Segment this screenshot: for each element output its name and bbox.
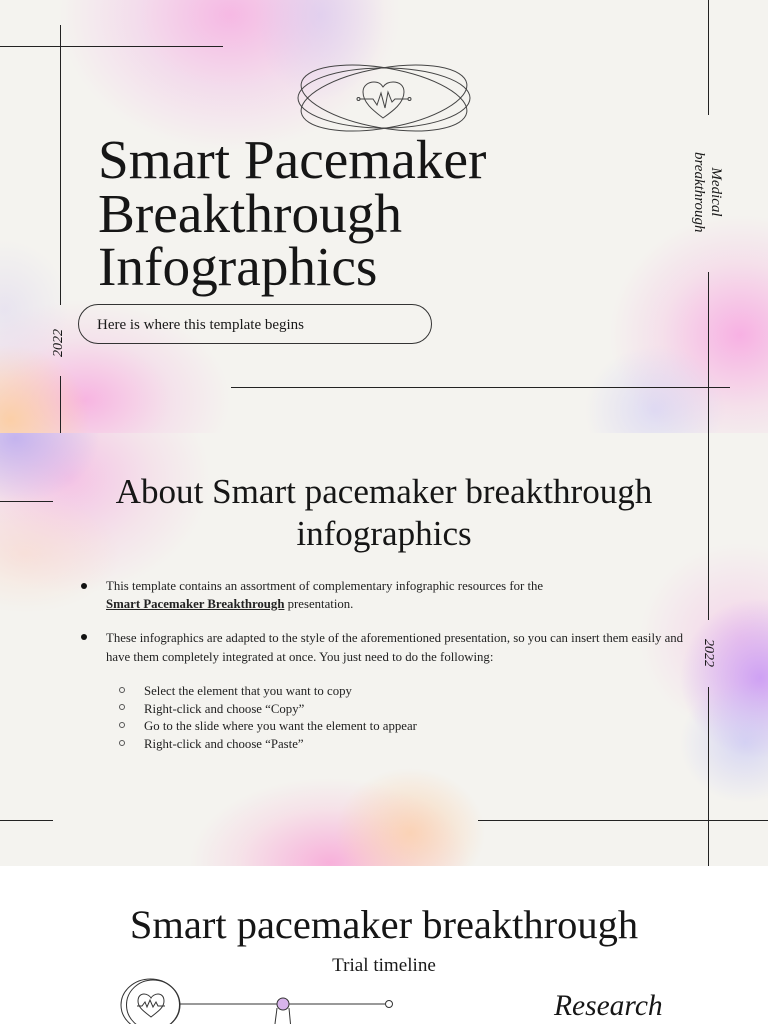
paragraph 2: have them completely integrated at once. You just need to do the following: [106, 650, 493, 664]
side label [691, 152, 724, 233]
step list: Select the element that you want to copy [144, 684, 352, 698]
icon: heart with orbit rings [298, 64, 470, 132]
paragraph 1: This template contains an assortment of complementary infographic resources for the [106, 579, 543, 593]
step list: Right-click and choose “Copy” [144, 702, 304, 716]
heading: About Smart pacemaker breakthrough [116, 472, 652, 511]
bullet 2 [81, 634, 87, 640]
title: Smart Pacemaker [98, 129, 486, 190]
year label: 2022 [701, 639, 716, 667]
subtitle pill [78, 304, 432, 344]
gradient: right pink glow [610, 215, 768, 455]
paragraph 1 [106, 579, 543, 610]
title: Infographics [98, 236, 377, 297]
panel: trial timeline slide [0, 866, 768, 1024]
end node [386, 1000, 392, 1008]
gradient: right pink glow [640, 543, 768, 733]
gradient: top-left pink glow [0, 363, 210, 593]
side label: Medical [708, 167, 724, 217]
purple node with stem [275, 998, 290, 1024]
panel: about slide [0, 433, 768, 866]
heading: infographics [296, 514, 472, 553]
gradient: top pink glow [60, 0, 400, 150]
paragraph 1: Smart Pacemaker Breakthrough presentation. [106, 596, 353, 610]
icon: heart medallion [121, 979, 180, 1024]
title: Breakthrough [98, 182, 402, 244]
year label: 2022 [51, 329, 66, 357]
subheading: Trial timeline [332, 955, 436, 976]
step list: Right-click and choose “Paste” [144, 736, 304, 750]
subtitle pill: Here is where this template begins [97, 317, 304, 333]
paragraph 2 [106, 631, 683, 664]
step list: Go to the slide where you want the element to appear [144, 719, 417, 733]
heading [116, 472, 652, 553]
step list [144, 684, 417, 750]
gradient: right lavender glow [585, 345, 725, 475]
gradient: top lavender glow [255, 0, 385, 100]
section label: Research [554, 990, 663, 1022]
gradient: top-left peach glow [0, 493, 120, 613]
gradient: right purple glow [680, 598, 768, 758]
timeline chart [120, 978, 393, 1024]
gradient: left lavender glow [0, 240, 70, 380]
gradient: bottom orange glow [335, 768, 485, 898]
gradient: lower-left orange glow [0, 345, 90, 495]
heading: Smart pacemaker breakthrough [130, 902, 638, 947]
gradient: top-left lavender glow [0, 373, 100, 503]
gradient: right lavender glow [680, 683, 768, 803]
title [98, 129, 486, 297]
panel: cover slide [0, 0, 768, 433]
text block: instructions [81, 579, 683, 750]
gradient: bottom pink glow [190, 778, 470, 948]
timeline line [180, 1003, 385, 1005]
gradient: lower-left pink glow [0, 300, 230, 500]
step rings [119, 687, 125, 746]
bullet 1 [81, 583, 87, 589]
side label: breakthrough [691, 152, 707, 233]
paragraph 2: These infographics are adapted to the style of the aforementioned presentation, so you can insert them easily and [106, 631, 683, 645]
